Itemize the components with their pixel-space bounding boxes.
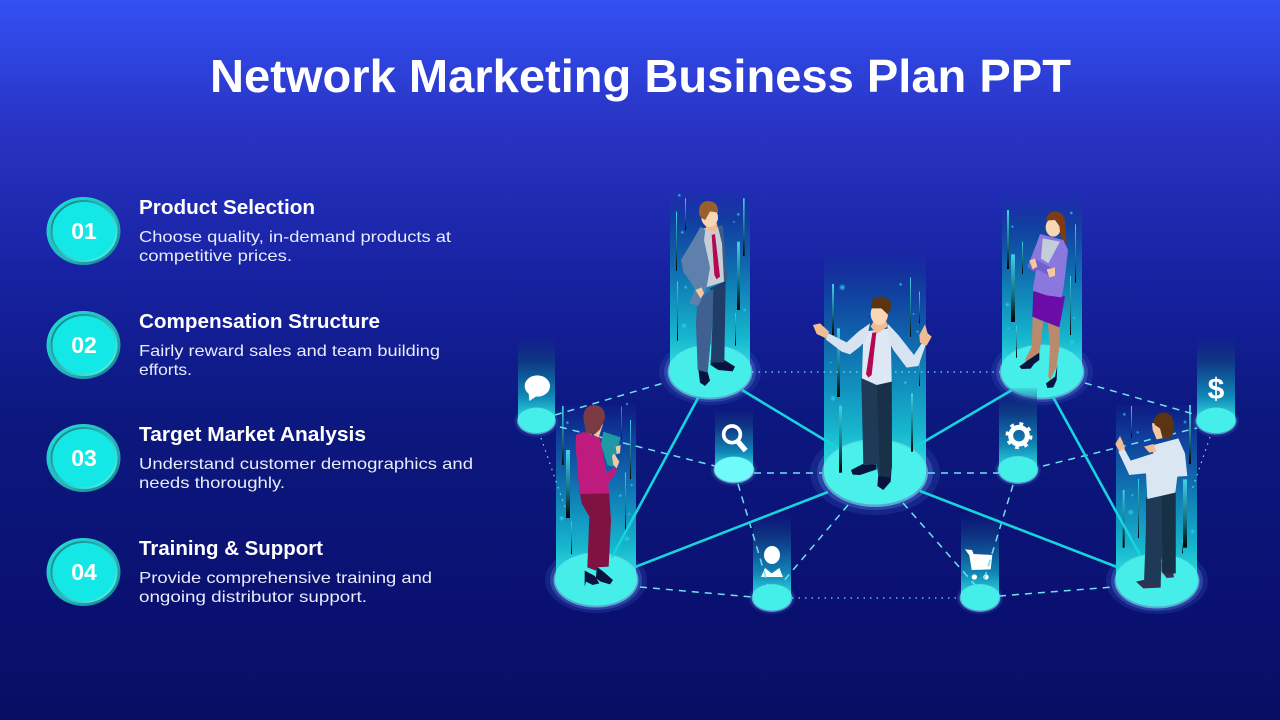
platform: woman upper right xyxy=(991,195,1093,405)
body 02 xyxy=(139,343,440,379)
list item 03: target market analysis xyxy=(46,424,473,492)
heading 02: Compensation Structure xyxy=(139,311,380,333)
icon: dollar sign: $ xyxy=(1208,373,1225,406)
icon: gear xyxy=(1007,424,1031,448)
body 02: efforts. xyxy=(139,362,192,379)
icon: chat bubble xyxy=(525,375,550,401)
badge 03 xyxy=(46,424,120,492)
body 04: Provide comprehensive training and xyxy=(139,570,432,587)
body 03: Understand customer demographics and xyxy=(139,456,473,473)
title: Network Marketing Business Plan PPT xyxy=(210,50,1071,102)
node: chat xyxy=(514,338,558,437)
list item 02: compensation structure xyxy=(46,311,440,379)
badge 02: 02 xyxy=(71,332,97,358)
node: gear xyxy=(995,388,1041,486)
body 04 xyxy=(139,570,432,606)
figure: man in blue suit xyxy=(681,201,735,386)
figure: center man xyxy=(813,296,932,490)
body 01: competitive prices. xyxy=(139,248,292,265)
node: person xyxy=(749,515,795,614)
badge 01: 01 xyxy=(71,218,97,244)
node: search xyxy=(711,410,757,486)
body 02: Fairly reward sales and team building xyxy=(139,343,440,360)
list item 01: product selection xyxy=(46,197,452,265)
badge 02 xyxy=(46,311,120,379)
body 03 xyxy=(139,456,473,492)
body 03: needs thoroughly. xyxy=(139,475,285,492)
icon: magnifier xyxy=(724,426,746,451)
badge 03: 03 xyxy=(71,445,97,471)
heading 01: Product Selection xyxy=(139,197,315,219)
badge 01 xyxy=(46,197,120,265)
body 01: Choose quality, in-demand products at xyxy=(139,229,452,246)
platform: man upper left xyxy=(659,190,761,405)
heading 04: Training & Support xyxy=(139,538,323,560)
body 01 xyxy=(139,229,452,265)
platform: center man xyxy=(810,250,940,515)
list item 04: training and support xyxy=(46,538,432,606)
badge 04: 04 xyxy=(71,559,97,585)
platform: man lower right xyxy=(1106,405,1208,614)
badge 04 xyxy=(46,538,120,606)
figure: man in white shirt from behind xyxy=(1115,413,1187,588)
icon: user xyxy=(761,546,783,577)
platform: woman left xyxy=(545,402,647,613)
icon: shopping cart xyxy=(965,549,992,580)
solid connectors xyxy=(612,390,1140,567)
node: dollar xyxy=(1193,338,1239,437)
figure: woman in purple xyxy=(1019,211,1068,388)
dashed and dotted connectors xyxy=(541,372,1210,598)
figure: woman in magenta xyxy=(576,405,621,587)
network diagram xyxy=(514,190,1239,614)
heading 03: Target Market Analysis xyxy=(139,424,366,446)
node: cart xyxy=(957,515,1003,614)
body 04: ongoing distributor support. xyxy=(139,589,367,606)
